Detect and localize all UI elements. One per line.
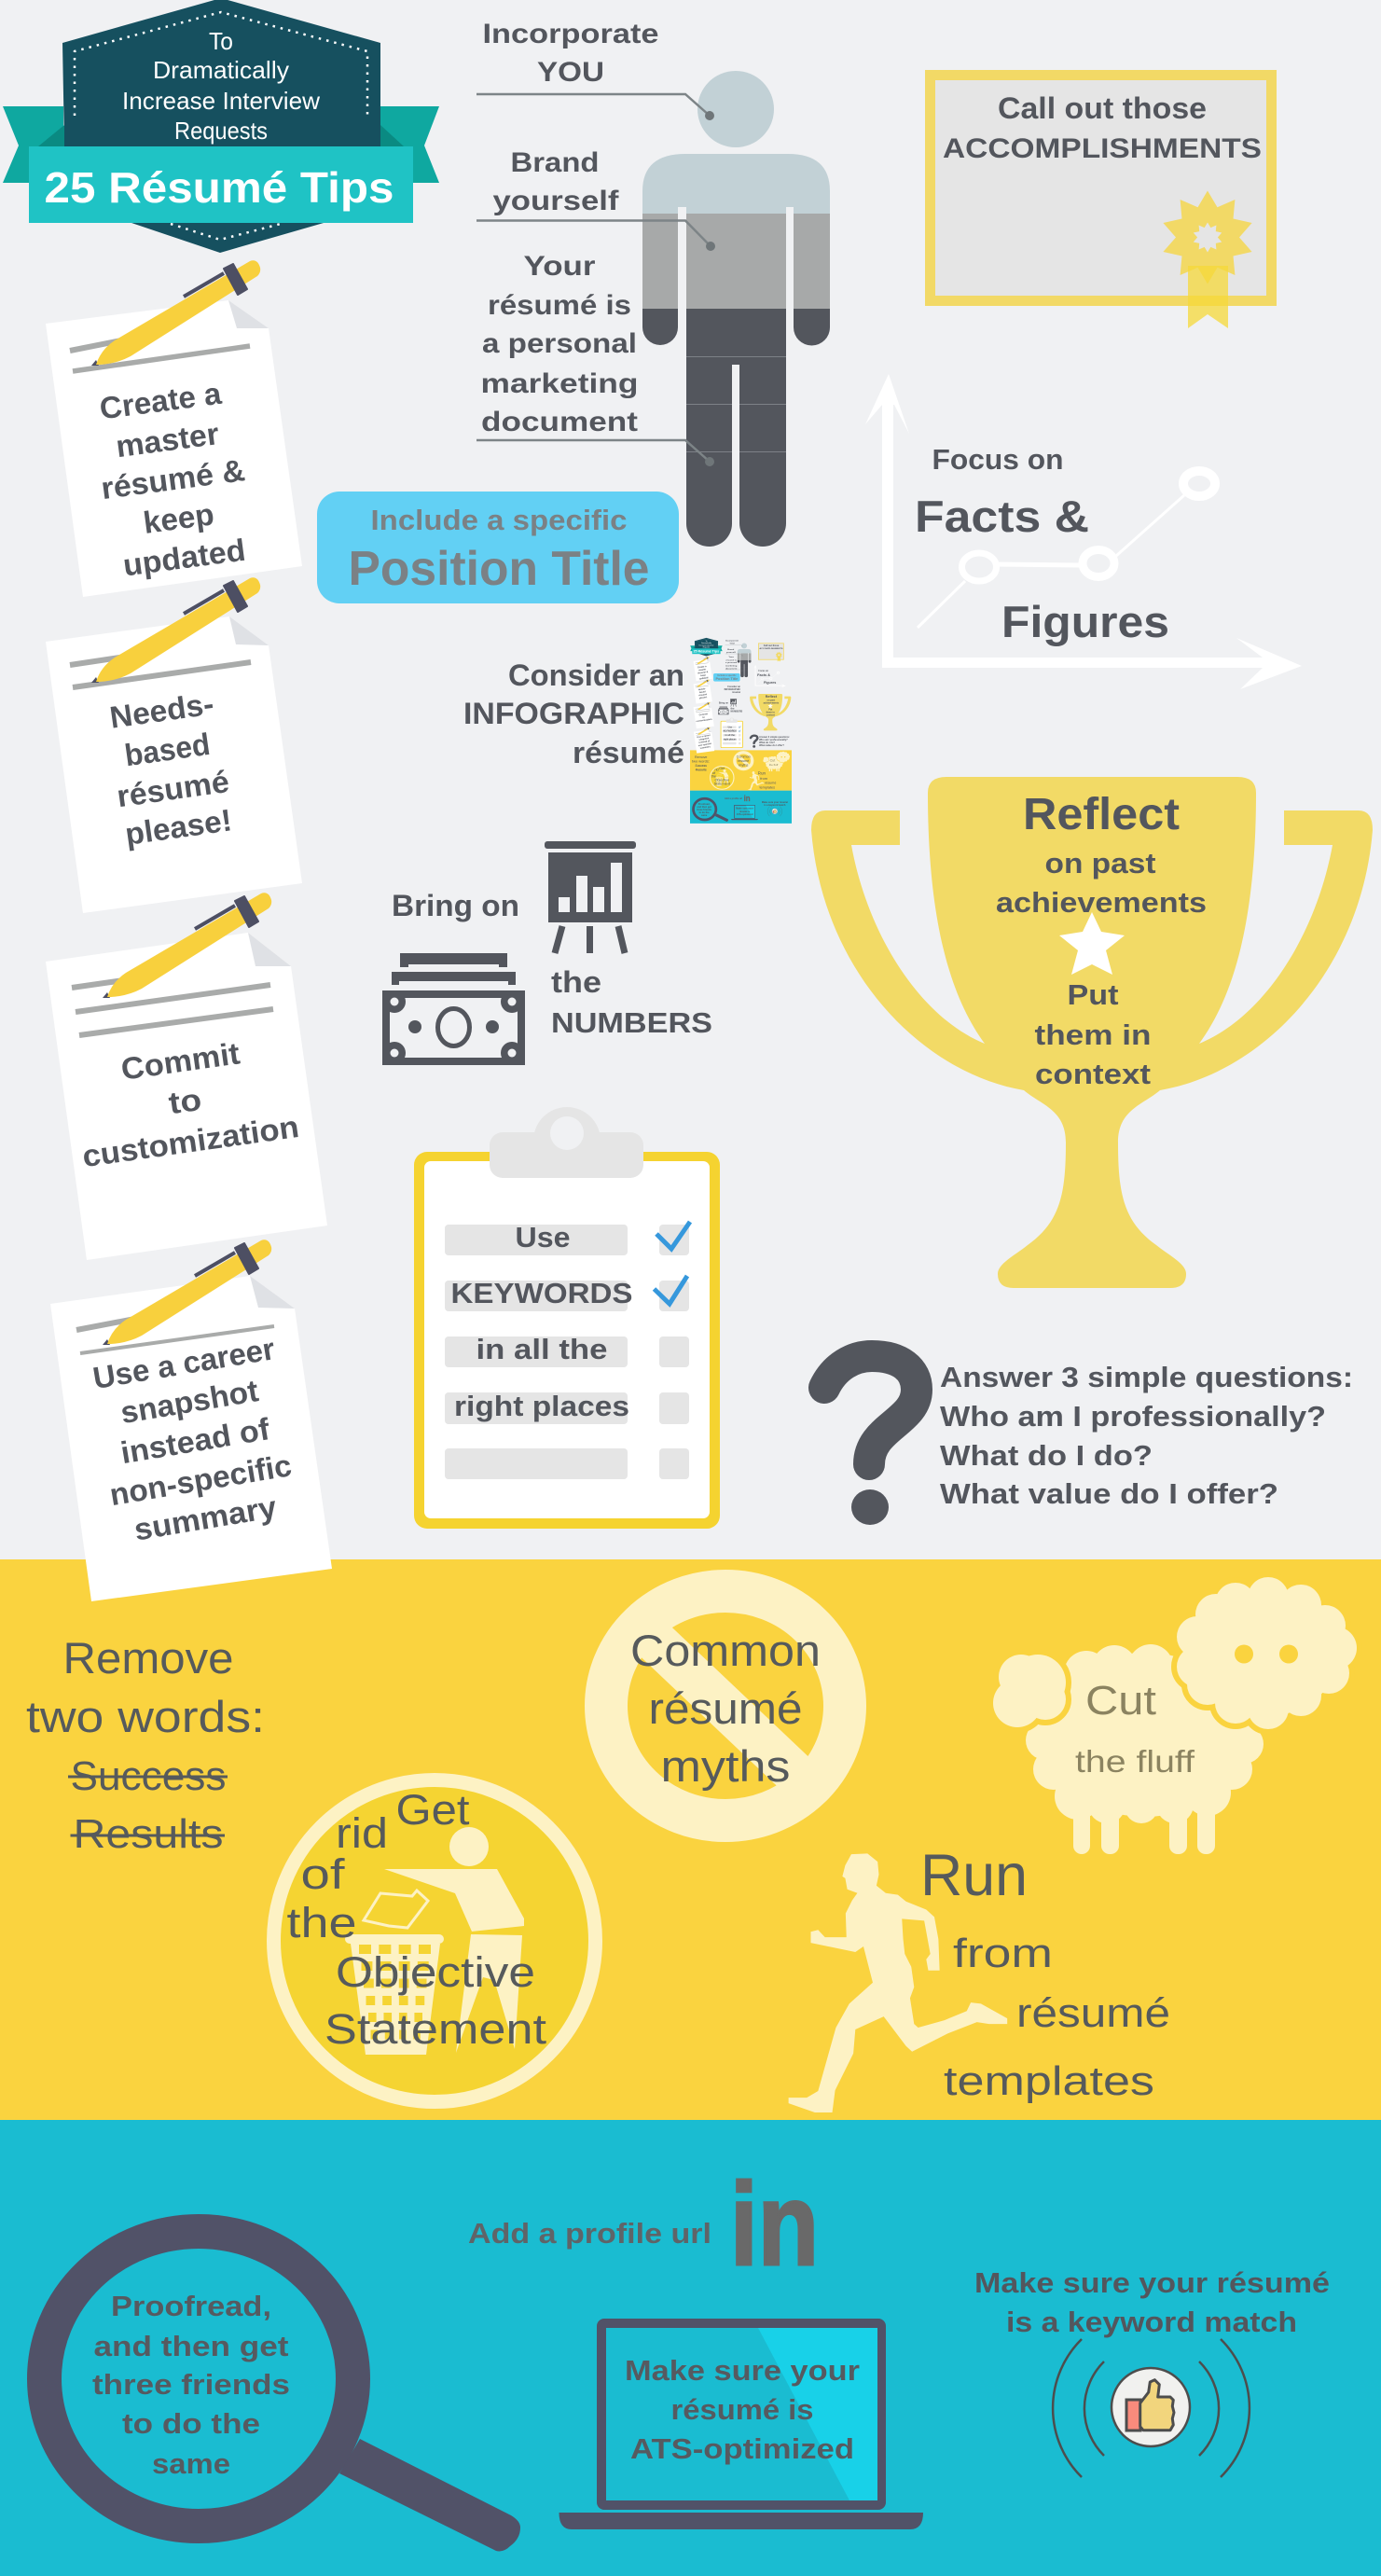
text: proofread: and then get: [93, 2330, 289, 2362]
icon: laptop: [559, 2319, 923, 2529]
sheep head: [1177, 1577, 1357, 1729]
text: ats optimized: Make sure your: [625, 2354, 860, 2387]
icon: money: [382, 953, 525, 1065]
trophy text: them in: [1035, 1018, 1151, 1051]
trophy text: Reflect: [1023, 790, 1180, 839]
hexagon: [62, 0, 380, 253]
icon: pen: [91, 260, 260, 366]
note 2: needs-based: [46, 577, 302, 913]
certificate text: ACCOMPLISHMENTS: [943, 133, 1262, 164]
text: remove two words: Remove: [63, 1633, 233, 1683]
note 1: master resume: [46, 260, 302, 597]
text: proofread: to do the: [122, 2407, 260, 2440]
text: remove two words: Success: [71, 1753, 226, 1799]
icon: person: [384, 1827, 524, 2053]
icon: prohibition sign with text: [606, 1591, 845, 1821]
text: consider an infographic: [463, 658, 684, 769]
banner: [29, 146, 413, 223]
text: bring on the numbers: NUMBERS: [551, 1006, 712, 1039]
mini infographic thumbnail: [690, 638, 792, 824]
icon: presentation board: [545, 841, 636, 953]
text: three questions: What value do I offer?: [940, 1477, 1278, 1510]
note 1 text: Create a: [98, 376, 224, 425]
note 3 text: customization: [80, 1109, 301, 1173]
text: remove two words: two words:: [26, 1692, 265, 1741]
text: consider an infographic: INFOGRAPHIC: [463, 697, 684, 730]
note 2 text: please!: [123, 802, 234, 852]
subtitle: Dramatically: [153, 56, 289, 84]
note 3 text: [80, 1035, 301, 1173]
text: personal marketing document: document: [481, 407, 638, 437]
trophy text: Put: [1067, 978, 1119, 1011]
text: three questions: Who am I professionally?: [940, 1400, 1326, 1433]
line series: [918, 471, 1215, 628]
trophy text: achievements: [996, 886, 1207, 919]
icon: sheep: [993, 1577, 1357, 1854]
leader line: brand: [476, 220, 715, 251]
certificate text: Call out those: [998, 91, 1207, 125]
text: personal marketing document: résumé is: [488, 290, 631, 321]
text: consider an infographic: résumé: [573, 736, 684, 769]
note 4 text: snapshot: [118, 1373, 261, 1430]
trophy: [811, 777, 1373, 1288]
text: bring on the numbers: the: [551, 965, 601, 999]
icon: pen: [91, 577, 260, 683]
axes: [865, 374, 1302, 689]
icon: magnifier with proofread text: [45, 2231, 520, 2551]
checklist text: Use: [515, 1221, 571, 1253]
text: run from templates: [920, 1843, 1170, 2104]
sheep body: [1026, 1644, 1264, 1823]
icon: pen: [103, 1240, 271, 1345]
subtitle: To: [209, 27, 233, 55]
text: bring on the numbers: Bring on: [392, 889, 519, 922]
note 4 text: [90, 1331, 294, 1547]
text: incorporate you: Incorporate: [483, 19, 658, 49]
note 4 text: summary: [131, 1489, 280, 1547]
panel: teal section background: [0, 2120, 1381, 2576]
panel: clipboard checklist: [414, 1107, 720, 1529]
text: run from templates: templates: [944, 2058, 1154, 2104]
text: remove two words: [26, 1633, 265, 1857]
note 1 text: updated: [121, 533, 247, 583]
ribbon folds: [38, 125, 404, 146]
text: common myths: myths: [660, 1741, 791, 1791]
panel: certificate: [925, 70, 1277, 328]
text: cut the fluff: [1075, 1678, 1195, 1779]
icon: waste basket: [345, 1934, 444, 2055]
checklist text: [451, 1221, 632, 1422]
text: bring on the numbers: [392, 889, 712, 1039]
text: consider an infographic: Consider an: [508, 658, 684, 692]
text: objective statement: Statement: [325, 2005, 547, 2053]
text: run from templates: résumé: [1016, 1990, 1170, 2036]
icon: paper scrap: [364, 1890, 428, 1928]
text: common myths: [630, 1626, 821, 1791]
text: objective statement: the: [287, 1899, 356, 1946]
note 2 text: [107, 686, 234, 852]
callout: position title: Include a specific: [371, 504, 627, 536]
sheep rear puff: [993, 1655, 1066, 1727]
text: cut the fluff: the fluff: [1075, 1744, 1195, 1779]
leader line: document: [476, 440, 714, 466]
icon: pen: [103, 893, 271, 998]
icon: thumbs up with signal arcs: [1053, 2339, 1250, 2477]
text: add a profile url: Add a profile url: [468, 2217, 711, 2250]
note 1 text: résumé &: [99, 452, 247, 506]
text: proofread: Proofread,: [111, 2290, 271, 2322]
icon: runner: [789, 1843, 1170, 2112]
certificate text: [943, 91, 1262, 164]
icon: rosette: [1163, 190, 1252, 328]
note 4 text: non-specific: [107, 1447, 294, 1512]
trophy text: [996, 790, 1207, 1090]
text: ats optimized: résumé is: [671, 2393, 813, 2426]
text: run from templates: Run: [920, 1843, 1028, 1908]
trophy text: context: [1035, 1058, 1151, 1090]
text: run from templates: from: [953, 1931, 1053, 1976]
note 3 text: Commit: [118, 1035, 242, 1087]
text: objective statement: Get: [395, 1786, 470, 1834]
text: proofread: same: [152, 2447, 230, 2480]
text: keyword match: [974, 2266, 1330, 2338]
text: three questions: [940, 1361, 1353, 1510]
text: ats optimized: [625, 2354, 860, 2465]
note 4 text: Use a career: [90, 1331, 277, 1395]
text: personal marketing document: a personal: [482, 328, 637, 359]
callout: position title: [317, 492, 679, 603]
icon: linkedin: in: [730, 2160, 819, 2290]
panel: yellow section background: [0, 1559, 1381, 2120]
page background: [0, 0, 1381, 1559]
note 1 text: [98, 376, 247, 583]
icon: star: [1059, 912, 1125, 975]
subtitle: Requests: [174, 117, 268, 145]
text: keyword match: Make sure your résumé: [974, 2266, 1330, 2299]
icon: check marks: [655, 1222, 690, 1304]
icon: question mark: [824, 1356, 917, 1525]
checklist text: KEYWORDS: [451, 1277, 632, 1309]
text: ats optimized: ATS-optimized: [630, 2432, 854, 2465]
checklist text: in all the: [476, 1333, 608, 1365]
text: incorporate you: [483, 19, 658, 88]
dotted border: [75, 12, 367, 240]
text: objective statement: rid: [336, 1809, 388, 1857]
text: brand yourself: [492, 147, 620, 216]
note 3: customization: [46, 893, 327, 1260]
icon: trash circle: [274, 1780, 595, 2102]
chart: facts and figures: [865, 374, 1302, 689]
text: brand yourself: yourself: [492, 186, 620, 216]
sheep legs: [1073, 1800, 1215, 1854]
text: common myths: Common: [630, 1626, 821, 1675]
text: personal marketing document: marketing: [481, 368, 638, 399]
subtitle: [122, 27, 320, 145]
subtitle: Increase Interview: [122, 87, 320, 115]
chart text: [915, 443, 1169, 646]
leader line: you: [476, 94, 714, 120]
head: [697, 71, 774, 147]
text: personal marketing document: [481, 251, 638, 437]
ribbon tails: [3, 106, 439, 183]
text: personal marketing document: Your: [524, 251, 596, 282]
note 1 text: master: [114, 416, 221, 464]
clipboard clip: [490, 1107, 643, 1178]
text: brand yourself: Brand: [511, 147, 599, 178]
human figure: [634, 71, 839, 561]
chart text: Focus on: [932, 443, 1063, 476]
text: keyword match: is a keyword match: [1006, 2306, 1297, 2338]
text: proofread: three friends: [92, 2368, 290, 2401]
note 4 text: instead of: [118, 1411, 273, 1470]
text: remove two words: Results: [73, 1811, 224, 1857]
note 3 text: to: [166, 1082, 203, 1120]
checklist text: right places: [454, 1390, 629, 1422]
checklist rows: [445, 1225, 689, 1479]
text: objective statement: Objective: [336, 1948, 535, 1996]
text: three questions: What do I do?: [940, 1439, 1153, 1472]
note 4: career snapshot: [50, 1240, 332, 1601]
callout: position title: Position Title: [349, 542, 649, 596]
trophy shape: [811, 777, 1373, 1288]
note 2 text: résumé: [115, 764, 231, 813]
note 1 text: keep: [141, 496, 216, 540]
note 2 text: based: [122, 727, 213, 772]
body: [634, 149, 839, 561]
text: common myths: résumé: [649, 1683, 802, 1733]
title: 25 Résumé Tips: [45, 163, 394, 212]
text: incorporate you: YOU: [537, 57, 604, 88]
text: three questions: Answer 3 simple questions:: [940, 1361, 1353, 1393]
text: objective statement: [287, 1786, 547, 2053]
text: cut the fluff: Cut: [1085, 1678, 1156, 1724]
trophy text: on past: [1044, 847, 1156, 879]
chart text: Figures: [1001, 597, 1169, 646]
text: objective statement: of: [300, 1850, 345, 1898]
chart text: Facts &: [915, 492, 1089, 541]
note 2 text: Needs-: [107, 686, 215, 735]
title badge: [3, 0, 439, 253]
text: proofread: [92, 2290, 290, 2480]
